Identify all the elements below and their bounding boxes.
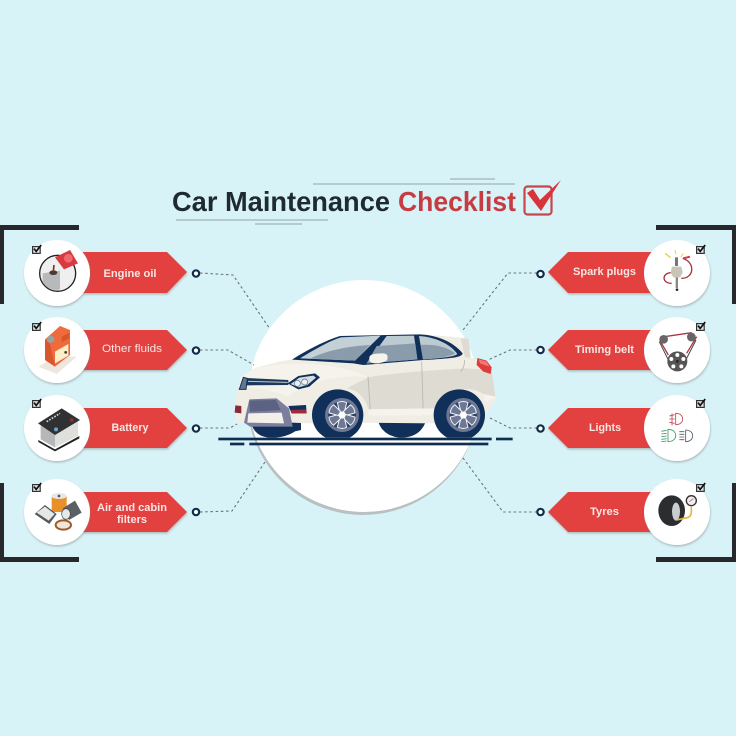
windows: [292, 334, 463, 365]
wheel arch flare: [368, 408, 438, 415]
checkbox: [697, 322, 705, 330]
front bumper opening: [244, 398, 293, 427]
item: spark plugs: [548, 240, 710, 306]
icon: title check mark: [524, 180, 561, 214]
item: air and cabin filters: [24, 479, 187, 545]
dotted connectors: [200, 273, 537, 512]
item: lights: [548, 395, 710, 461]
icon: tyre and pressure gauge: [658, 495, 696, 526]
label text: Lights: [589, 422, 621, 434]
red label: [82, 492, 187, 532]
red label: [82, 408, 187, 448]
car body: [235, 335, 496, 425]
checkbox: [697, 245, 705, 253]
label text: Battery: [112, 422, 149, 434]
red label: [548, 408, 655, 448]
car illustration: [218, 334, 513, 445]
checkbox: [33, 399, 41, 407]
door lines: [368, 360, 464, 415]
tail light: [477, 358, 492, 374]
red label: [548, 330, 655, 370]
red label: [82, 330, 187, 370]
white icon circle: [24, 395, 90, 461]
item: other fluids: [24, 317, 187, 383]
white icon circle: [644, 240, 710, 306]
label text: [97, 502, 167, 526]
icon: car battery: [38, 408, 80, 451]
white icon circle: [644, 479, 710, 545]
white icon circle: [644, 317, 710, 383]
item: engine oil: [24, 240, 187, 306]
title: Car Maintenance: [172, 186, 390, 217]
infographic canvas: [0, 178, 736, 562]
corner brackets: [0, 225, 736, 562]
icon: spark plug: [664, 250, 692, 291]
label text: Air and cabin: [97, 502, 167, 514]
checkbox: [33, 322, 41, 330]
checkbox: [697, 483, 705, 491]
icon: fluid can: [38, 326, 77, 374]
icon: oil pouring into engine: [40, 250, 78, 291]
title: [172, 179, 516, 224]
label text: Other fluids: [102, 343, 163, 355]
label text: Tyres: [590, 506, 619, 518]
label text: Spark plugs: [573, 266, 636, 278]
item: battery: [24, 395, 187, 461]
headlight: [288, 373, 320, 389]
item: tyres: [548, 479, 710, 545]
connector end dots: [193, 270, 544, 515]
icon: filters: [35, 493, 82, 530]
checkbox: [33, 483, 41, 491]
title: Checklist: [398, 186, 516, 217]
red label: [82, 252, 187, 293]
label text: filters: [117, 514, 147, 526]
white icon circle: [24, 240, 90, 306]
road lines: [218, 438, 513, 445]
white icon circle: [24, 317, 90, 383]
icon: light symbols: [661, 413, 693, 442]
grille: [247, 378, 288, 385]
icon: timing belt: [659, 333, 697, 371]
checkbox: [33, 245, 41, 253]
label text: Engine oil: [104, 268, 156, 280]
underbody: [251, 422, 426, 438]
label text: Timing belt: [575, 344, 634, 356]
red label: [548, 492, 655, 532]
tyres: [312, 389, 485, 441]
item: timing belt: [548, 317, 710, 383]
mirror: [369, 353, 388, 363]
white icon circle: [644, 395, 710, 461]
door shading: [347, 368, 495, 409]
checkbox: [697, 399, 705, 407]
white icon circle: [24, 479, 90, 545]
central white circle: [247, 280, 480, 515]
wheels: [325, 398, 359, 432]
fog lamps: [288, 405, 307, 413]
red label: [548, 252, 655, 293]
